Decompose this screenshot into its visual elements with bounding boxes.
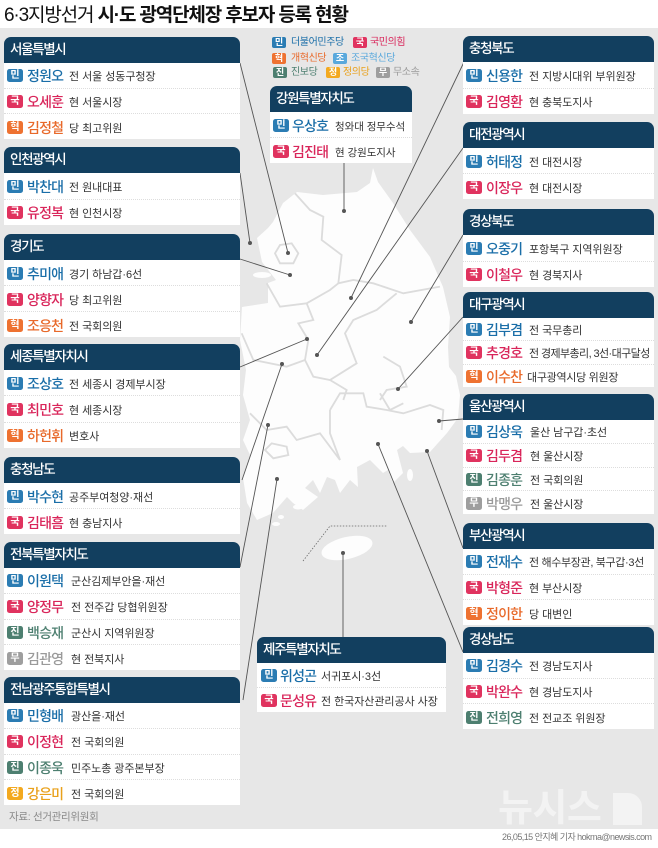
candidate: 박수현 (27, 488, 63, 504)
candidate: 경기 하남갑·6선 (69, 268, 142, 280)
heading (463, 122, 654, 148)
heading: 서울특별시 (10, 42, 65, 57)
legend: 더불어민주당 (291, 37, 344, 48)
heading (4, 234, 240, 260)
candidate (4, 312, 240, 337)
candidate (463, 653, 654, 679)
candidate: 이원택 (27, 573, 63, 589)
heading (4, 37, 240, 63)
candidate: 박찬대 (27, 179, 63, 195)
candidate: 민 (469, 426, 479, 437)
candidate: 국 (10, 516, 20, 528)
candidate: 김경수 (486, 658, 522, 674)
panel: 경기도 (4, 234, 240, 337)
candidate: 국 (469, 182, 479, 192)
candidate (4, 173, 240, 200)
legend (272, 36, 420, 78)
legend: 무 (379, 67, 387, 77)
legend: 조 (336, 53, 344, 63)
legend: 민 (275, 37, 283, 47)
source note: 자료: 선거관리위원회 (9, 811, 98, 823)
heading: 충청남도 (10, 462, 54, 477)
candidate: 국 (10, 207, 20, 218)
candidate: 당 최고위원 (69, 123, 122, 135)
heading (4, 147, 240, 173)
candidate: 민 (469, 243, 479, 254)
candidate (4, 63, 240, 89)
candidate: 전 해수부장관, 북구갑·3선 (529, 557, 644, 569)
candidate: 하헌휘 (27, 428, 63, 444)
candidate: 이장우 (486, 180, 522, 196)
panel: 충청북도 (463, 36, 654, 114)
candidate: 민 (10, 575, 20, 586)
candidate (463, 148, 654, 174)
candidate: 민 (10, 378, 20, 389)
heading (257, 637, 446, 663)
candidate (463, 341, 654, 365)
candidate: 현 서울시장 (69, 97, 122, 109)
heading (4, 457, 240, 483)
candidate: 민 (10, 268, 20, 278)
candidate: 전 울산시장 (530, 499, 583, 511)
candidate (4, 114, 240, 139)
candidate: 당 대변인 (529, 609, 572, 621)
candidate: 변호사 (69, 431, 99, 443)
candidate: 민 (10, 181, 20, 192)
candidate: 김종훈 (486, 472, 522, 488)
candidate: 민 (10, 70, 20, 81)
heading (463, 209, 654, 235)
legend: 정의당 (343, 67, 369, 78)
candidate (463, 575, 654, 600)
candidate (463, 174, 654, 199)
panel: 대전광역시 (463, 122, 654, 199)
candidate: 박맹우 (486, 496, 522, 512)
candidate: 광산을·재선 (71, 711, 125, 723)
candidate: 진 (469, 712, 479, 723)
candidate (463, 62, 654, 88)
legend: 무소속 (393, 67, 419, 78)
candidate: 진 (469, 474, 479, 485)
candidate: 전 국회의원 (71, 737, 124, 749)
candidate (4, 509, 240, 534)
legend: 개혁신당 (291, 53, 326, 64)
candidate (4, 594, 240, 620)
candidate: 현 부산시장 (529, 583, 582, 595)
candidate: 추미애 (27, 266, 63, 282)
candidate: 정이한 (486, 606, 522, 622)
candidate (463, 365, 654, 387)
candidate: 혁 (469, 608, 479, 619)
legend: 정 (329, 67, 337, 77)
heading: 전북특별자치도 (10, 547, 88, 562)
panel: 서울특별시 (4, 37, 240, 139)
candidate: 전 전교조 위원장 (529, 713, 606, 725)
panel: 세종특별자치시 (4, 344, 240, 448)
candidate: 국 (469, 450, 479, 461)
candidate: 전 경남도지사 (529, 661, 592, 673)
candidate: 민 (469, 556, 479, 567)
candidate: 국 (276, 146, 286, 156)
candidate: 진 (10, 627, 20, 638)
candidate: 국 (10, 601, 20, 612)
candidate: 혁 (10, 430, 20, 441)
candidate: 정원오 (27, 68, 63, 84)
candidate (463, 318, 654, 341)
candidate (4, 483, 240, 509)
heading (463, 627, 654, 653)
heading: 경상북도 (469, 214, 513, 229)
candidate: 이종욱 (27, 760, 63, 776)
candidate: 대구광역시당 위원장 (527, 372, 618, 384)
candidate: 박완수 (486, 684, 522, 700)
candidate: 김상욱 (486, 424, 522, 440)
candidate: 현 충남지사 (69, 518, 122, 530)
candidate: 유정복 (27, 205, 63, 221)
legend: 진 (276, 67, 284, 77)
candidate (463, 491, 654, 514)
candidate (4, 729, 240, 754)
legend: 조국혁신당 (351, 53, 395, 64)
candidate: 전희영 (486, 710, 522, 726)
candidate (4, 286, 240, 312)
candidate: 박형준 (486, 580, 522, 596)
candidate (463, 444, 654, 468)
candidate: 정 (10, 788, 20, 799)
heading (463, 36, 654, 62)
candidate: 조상호 (27, 376, 63, 392)
candidate: 민형배 (27, 708, 63, 724)
candidate: 전 경제부총리, 3선·대구달성 (529, 348, 650, 360)
candidate (463, 468, 654, 491)
candidate: 민 (469, 660, 479, 671)
candidate (4, 370, 240, 396)
heading (463, 523, 654, 549)
candidate: 김정철 (27, 120, 63, 136)
credit line: 26,05,15 안지혜 기자 hokma@newsis.com (502, 832, 652, 842)
legend: 국민의힘 (370, 37, 405, 48)
candidate: 민 (469, 70, 479, 81)
candidate: 국 (10, 294, 20, 304)
candidate (463, 679, 654, 704)
candidate: 민 (264, 670, 274, 681)
candidate (4, 423, 240, 448)
heading: 제주특별자치도 (263, 642, 340, 657)
candidate: 전 지방시대위 부위원장 (529, 71, 636, 83)
panel: 대구광역시 (463, 292, 654, 387)
panel: 강원특별자치도 (270, 86, 412, 163)
candidate: 청와대 정무수석 (335, 120, 405, 132)
candidate: 전재수 (486, 554, 522, 570)
heading: 충청북도 (469, 41, 513, 56)
candidate: 포항북구 지역위원장 (529, 244, 623, 256)
heading: 경상남도 (469, 632, 513, 647)
candidate: 김진태 (292, 144, 328, 160)
panel: 울산광역시 (463, 394, 654, 514)
candidate: 김두겸 (486, 448, 522, 464)
panel: 충청남도 (4, 457, 240, 534)
candidate: 공주부여청양·재선 (69, 492, 153, 504)
candidate: 오세훈 (27, 94, 63, 110)
heading (270, 86, 412, 112)
heading (463, 292, 654, 318)
candidate: 국 (469, 582, 479, 593)
candidate: 김태흠 (27, 514, 63, 530)
candidate: 김부겸 (486, 322, 522, 338)
candidate: 무 (10, 653, 20, 664)
candidate: 위성곤 (280, 668, 316, 684)
heading: 부산광역시 (469, 528, 524, 543)
candidate: 서귀포시·3선 (321, 671, 381, 683)
candidate: 현 경북지사 (529, 270, 582, 282)
candidate: 양향자 (27, 292, 63, 308)
candidate: 국 (469, 347, 479, 358)
candidate: 국 (469, 686, 479, 697)
candidate (4, 396, 240, 423)
candidate (463, 235, 654, 262)
candidate: 김관영 (27, 651, 63, 667)
heading: 인천광역시 (10, 152, 65, 167)
candidate (4, 200, 240, 225)
candidate: 현 전북지사 (71, 654, 124, 666)
candidate: 국 (10, 404, 20, 415)
candidate: 현 대전시장 (529, 182, 582, 194)
legend: 혁 (275, 53, 283, 63)
panel: 인천광역시 (4, 147, 240, 225)
candidate: 전 세종시 경제부시장 (69, 379, 166, 391)
candidate (4, 780, 240, 805)
candidate (463, 420, 654, 444)
candidate: 울산 남구갑·초선 (530, 427, 607, 439)
candidate: 이철우 (486, 267, 522, 283)
panel: 부산광역시 (463, 523, 654, 625)
candidate: 전 국회의원 (69, 320, 122, 332)
panel: 전남광주통합특별시 (4, 677, 240, 805)
candidate: 전 국무총리 (529, 325, 582, 337)
candidate: 김영환 (486, 94, 522, 110)
panel: 경상남도 (463, 627, 654, 729)
candidate: 추경호 (486, 345, 522, 361)
candidate: 민 (469, 324, 479, 335)
candidate: 전 한국자산관리공사 사장 (321, 696, 438, 708)
candidate (463, 549, 654, 575)
title: 6·3지방선거 시·도 광역단체장 후보자 등록 현황 (4, 5, 348, 26)
candidate (270, 138, 412, 163)
legend: 진보당 (291, 67, 317, 78)
candidate: 군산시 지역위원장 (71, 628, 155, 640)
candidate: 당 최고위원 (69, 294, 122, 306)
candidate: 전 원내대표 (69, 182, 122, 194)
heading (4, 542, 240, 568)
candidate: 현 울산시장 (530, 451, 583, 463)
candidate: 문성유 (280, 693, 316, 709)
heading: 전남광주통합특별시 (10, 682, 110, 697)
heading: 대전광역시 (469, 127, 524, 142)
candidate (4, 620, 240, 645)
candidate: 조응천 (27, 318, 63, 334)
candidate (257, 688, 446, 712)
candidate: 현 세종시장 (69, 405, 122, 417)
candidate: 전 서울 성동구청장 (69, 71, 156, 83)
candidate (463, 704, 654, 729)
candidate (270, 112, 412, 138)
candidate: 허태정 (486, 154, 522, 170)
candidate: 현 인천시장 (69, 208, 122, 220)
candidate: 혁 (469, 371, 479, 382)
candidate: 혁 (10, 320, 20, 330)
panel: 제주특별자치도 (257, 637, 446, 712)
heading: 강원특별자치도 (276, 91, 354, 106)
watermark: 뉴시스 logo: 뉴시스 (498, 788, 601, 830)
panel: 전북특별자치도 (4, 542, 240, 670)
candidate: 민주노총 광주본부장 (71, 763, 165, 775)
legend: 국 (356, 37, 364, 47)
candidate (4, 260, 240, 286)
candidate: 민 (10, 490, 20, 502)
candidate: 신용한 (486, 68, 522, 84)
candidate (463, 262, 654, 287)
candidate: 전 국회의원 (530, 475, 583, 487)
candidate: 국 (10, 96, 20, 107)
panel: 경상북도 (463, 209, 654, 287)
candidate: 군산김제부안을·재선 (71, 576, 165, 588)
candidate: 현 강원도지사 (335, 146, 396, 158)
candidate: 양정무 (27, 599, 63, 615)
candidate (4, 89, 240, 114)
candidate: 민 (276, 120, 286, 130)
candidate: 국 (264, 695, 274, 706)
candidate: 전 전주갑 당협위원장 (71, 602, 168, 614)
candidate: 현 충북도지사 (529, 97, 592, 109)
heading: 경기도 (10, 239, 43, 254)
heading: 울산광역시 (469, 399, 524, 414)
candidate: 오중기 (486, 241, 522, 257)
candidate (463, 600, 654, 625)
heading: 대구광역시 (469, 297, 524, 312)
heading (463, 394, 654, 420)
candidate: 우상호 (292, 118, 328, 134)
candidate: 최민호 (27, 402, 63, 418)
candidate: 강은미 (27, 786, 63, 802)
candidate: 전 대전시장 (529, 156, 582, 168)
candidate (4, 703, 240, 729)
heading: 세종특별자치시 (10, 349, 88, 364)
candidate (4, 568, 240, 594)
candidate: 백승재 (27, 625, 63, 641)
candidate: 혁 (10, 122, 20, 133)
candidate: 이정현 (27, 734, 63, 750)
candidate (463, 88, 654, 114)
candidate (4, 645, 240, 670)
candidate (4, 754, 240, 780)
candidate: 민 (10, 710, 20, 721)
candidate: 국 (469, 269, 479, 280)
heading (4, 677, 240, 703)
candidate: 무 (469, 498, 479, 509)
candidate: 전 국회의원 (71, 789, 124, 801)
candidate: 국 (469, 96, 479, 107)
candidate: 민 (469, 156, 479, 166)
candidate: 이수찬 (486, 369, 522, 385)
candidate (257, 663, 446, 688)
candidate: 진 (10, 762, 20, 773)
candidate: 국 (10, 736, 20, 747)
heading (4, 344, 240, 370)
candidate: 현 경남도지사 (529, 687, 592, 699)
